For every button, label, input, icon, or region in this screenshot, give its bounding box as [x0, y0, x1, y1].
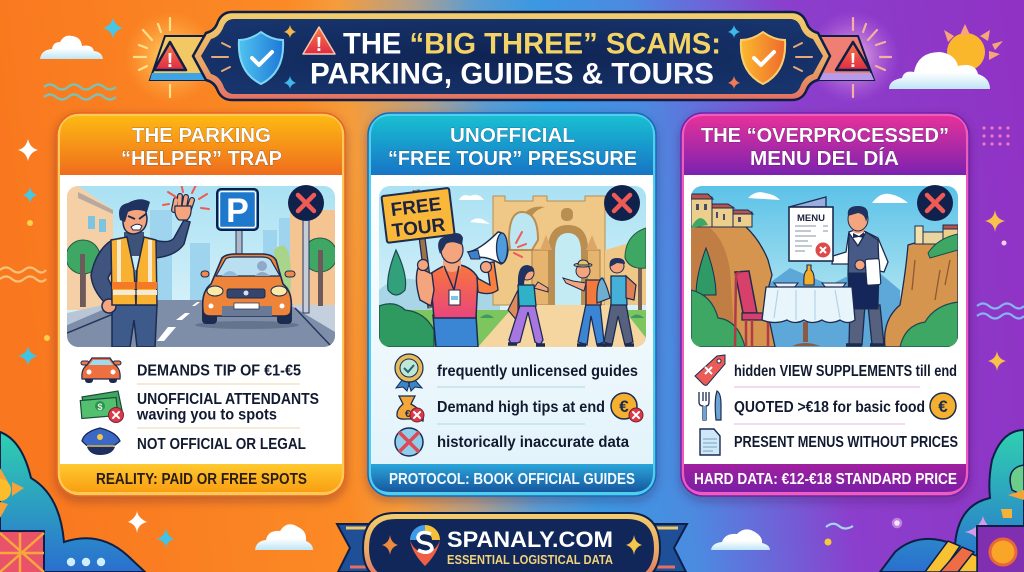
heading: “FREE TOUR” PRESSURE: [388, 148, 637, 170]
text list: parking: waving you to spots: [136, 406, 277, 424]
icon: no entry marker: [604, 185, 640, 221]
heading: [388, 125, 637, 170]
no sign pole: [303, 215, 309, 313]
alert marks: [163, 183, 209, 209]
left village: [691, 194, 753, 227]
text list: menu: QUOTED >€18 for basic food: [734, 399, 925, 416]
right warning tab: !: [850, 50, 856, 72]
heading: “HELPER” TRAP: [121, 148, 282, 170]
text list: menu: hidden VIEW SUPPLEMENTS till end: [734, 363, 957, 380]
parking sign: [236, 231, 242, 254]
icon: cash with cross: [80, 391, 124, 422]
icon: crossed globe: [395, 428, 423, 456]
panel: free tour pressure: [368, 113, 656, 496]
sign: FREE: [390, 194, 443, 221]
icon: no entry marker: [288, 185, 324, 221]
title warning icon: [303, 27, 335, 56]
heading: THE PARKING: [132, 125, 271, 147]
decoration: bottom-right shapes: [824, 430, 1024, 572]
decoration: left side sparkles: [18, 139, 50, 366]
footer badge: [337, 513, 687, 572]
heading: [701, 125, 949, 170]
icon: euro coin with cross: [611, 393, 643, 422]
right ribbon: [645, 524, 687, 572]
sign pole: [416, 190, 431, 308]
icon: badge: [395, 354, 423, 391]
decoration: top-left cloud: [40, 36, 103, 59]
ground: [379, 310, 646, 347]
illustration: free tour: [379, 186, 646, 347]
sign: [381, 188, 455, 243]
text list: parking: UNOFFICIAL ATTENDANTS: [137, 391, 319, 408]
text list: parking: DEMANDS TIP OF €1-€5: [137, 363, 301, 380]
title text: PARKING, GUIDES & TOURS: [310, 58, 714, 90]
decoration: bottom sparkles: [128, 511, 174, 548]
icon: euro coin: €: [938, 397, 948, 416]
text list: free tour: frequently unlicensed guides: [437, 363, 638, 380]
decoration: top-left waves: [44, 84, 116, 100]
tagline: ESSENTIAL LOGISTICAL DATA: [447, 552, 614, 567]
heading: [121, 125, 282, 170]
icon: fork and knife: [699, 391, 721, 420]
right cliff: [885, 232, 958, 347]
woman tourist: [508, 290, 518, 322]
bush left: [691, 290, 745, 347]
man in vest: [112, 305, 157, 347]
text list: free tour: [437, 363, 638, 451]
illustration: parking helper: P: [226, 192, 249, 230]
title text: [310, 28, 721, 90]
text list: parking: NOT OFFICIAL OR LEGAL: [137, 436, 306, 453]
icon: money bag with cross: €: [405, 409, 411, 420]
decoration: cyan star top-left: [103, 18, 123, 38]
decoration: right waves: [977, 304, 1024, 318]
table setting: [803, 322, 808, 342]
tree right: [310, 238, 335, 272]
decoration: bottom-right cloud: [711, 529, 770, 550]
text list: menu: [734, 363, 958, 451]
waiter: [849, 305, 884, 345]
heading: MENU DEL DÍA: [750, 147, 899, 170]
tree right: [638, 268, 642, 310]
decoration: bottom-left blob with sun and tile: [0, 432, 145, 572]
left cliff: [691, 226, 775, 347]
icon: money bag with cross: [397, 396, 424, 422]
callout: hard data: HARD DATA: €12-€18 STANDARD PRICE: [694, 471, 957, 488]
chair: [735, 271, 757, 313]
title warning icon: !: [316, 34, 322, 56]
megaphone: [468, 232, 508, 264]
callout: protocol: PROTOCOL: BOOK OFFICIAL GUIDES: [389, 471, 635, 488]
heading: UNOFFICIAL: [450, 125, 575, 147]
illustration: menu del dia: [691, 186, 958, 347]
text list: free tour: historically inaccurate data: [437, 434, 629, 451]
icon: no entry marker: [917, 185, 953, 221]
decoration: right side sparkles: [985, 210, 1006, 371]
cypress: [696, 248, 716, 295]
right shield icon: [728, 25, 812, 89]
logo: [410, 525, 440, 566]
header banner: [124, 11, 899, 103]
right warning tab: [807, 11, 899, 103]
icon: cash with cross: $: [97, 402, 103, 412]
title text: THE “BIG THREE” SCAMS:: [343, 28, 721, 60]
left warning tab: [124, 11, 216, 103]
tree left: [85, 274, 86, 307]
heading: THE “OVERPROCESSED”: [701, 125, 949, 147]
icon: euro coin with cross: €: [619, 397, 629, 416]
third tourist: [604, 304, 633, 345]
illustration: parking helper: [66, 183, 337, 347]
panel: overprocessed menu: [681, 113, 969, 496]
left shield icon: [212, 25, 296, 89]
text list: menu: PRESENT MENUS WITHOUT PRICES: [734, 434, 958, 451]
icon: document: [700, 429, 720, 455]
hat tourist: [578, 304, 604, 345]
icon: police cap: [82, 428, 120, 455]
car: [195, 321, 299, 329]
text list: free tour: Demand high tips at end: [437, 399, 605, 416]
bush right: [900, 302, 958, 347]
bush: [379, 304, 434, 347]
illustration: menu del dia: MENU: [797, 213, 825, 224]
icon: price tag: [695, 355, 725, 385]
decoration: dot grid: [982, 126, 1010, 146]
callout: reality: REALITY: PAID OR FREE SPOTS: [96, 471, 307, 488]
sign: TOUR: [391, 215, 447, 242]
cypress: [388, 250, 406, 295]
text list: parking: [136, 363, 319, 453]
decoration: left waves: [0, 268, 46, 282]
guide: [433, 315, 478, 347]
left ribbon: [337, 524, 380, 572]
icon: euro coin: [930, 393, 956, 419]
menu card: [789, 197, 826, 207]
left warning tab: !: [167, 50, 173, 72]
decoration: top-right cloud: [889, 52, 990, 89]
decoration: top-right sun: [944, 24, 1003, 71]
icon: car: [81, 358, 121, 383]
decoration: bottom-left cloud: [255, 524, 313, 550]
panel: parking helper trap: [57, 113, 345, 496]
brand name: SPANALY.COM: [447, 527, 613, 552]
